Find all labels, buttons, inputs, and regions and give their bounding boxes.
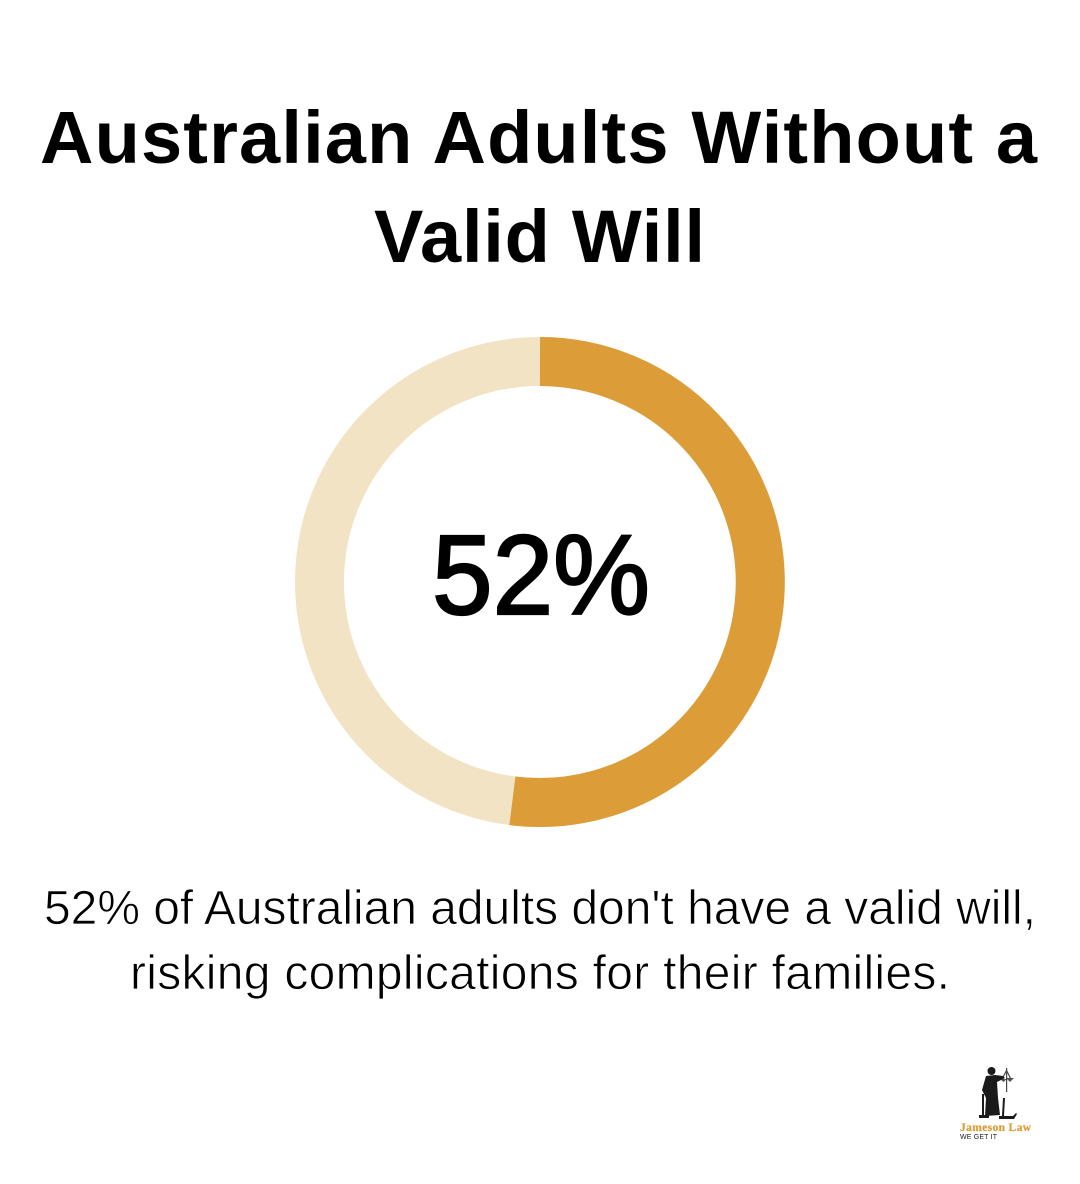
icon: lady justice (979, 1067, 1017, 1119)
donut value label: 52% (432, 512, 650, 638)
title: Australian Adults Without a (40, 96, 1038, 179)
title (40, 96, 1038, 278)
description text: 52% of Australian adults don't have a valid will, (44, 882, 1036, 935)
logo: Jameson Law (960, 1067, 1032, 1141)
logo tagline: WE GET IT (960, 1134, 998, 1141)
description text (44, 882, 1036, 1000)
title: Valid Will (374, 195, 705, 278)
description text: risking complications for their families. (130, 947, 950, 1000)
donut chart: 52% (320, 362, 760, 802)
logo wordmark: Jameson Law (960, 1122, 1032, 1134)
